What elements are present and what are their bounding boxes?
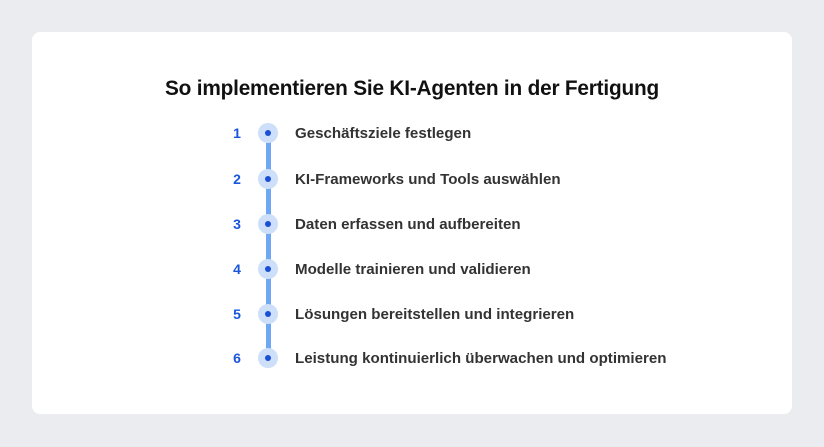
step 5 <box>233 304 574 324</box>
title: So implementieren Sie KI-Agenten in der Fertigung <box>165 77 659 100</box>
step 1: Geschäftsziele festlegen <box>295 125 471 142</box>
step 1 <box>233 123 471 143</box>
step 5: 5 <box>233 306 241 322</box>
step 2 <box>233 169 561 189</box>
step 1: 1 <box>233 125 241 141</box>
step 4: Modelle trainieren und validieren <box>295 261 531 278</box>
step 6: 6 <box>233 350 241 366</box>
step 2: KI-Frameworks und Tools auswählen <box>295 171 561 188</box>
step 2: 2 <box>233 171 241 187</box>
step 3: 3 <box>233 216 241 232</box>
card panel <box>32 32 792 414</box>
step 5: Lösungen bereitstellen und integrieren <box>295 306 574 323</box>
timeline line <box>266 133 271 358</box>
step 3 <box>233 214 521 234</box>
step 3: Daten erfassen und aufbereiten <box>295 216 521 233</box>
step 4: 4 <box>233 261 241 277</box>
step 4 <box>233 259 531 279</box>
step 6: Leistung kontinuierlich überwachen und optimieren <box>295 350 667 367</box>
